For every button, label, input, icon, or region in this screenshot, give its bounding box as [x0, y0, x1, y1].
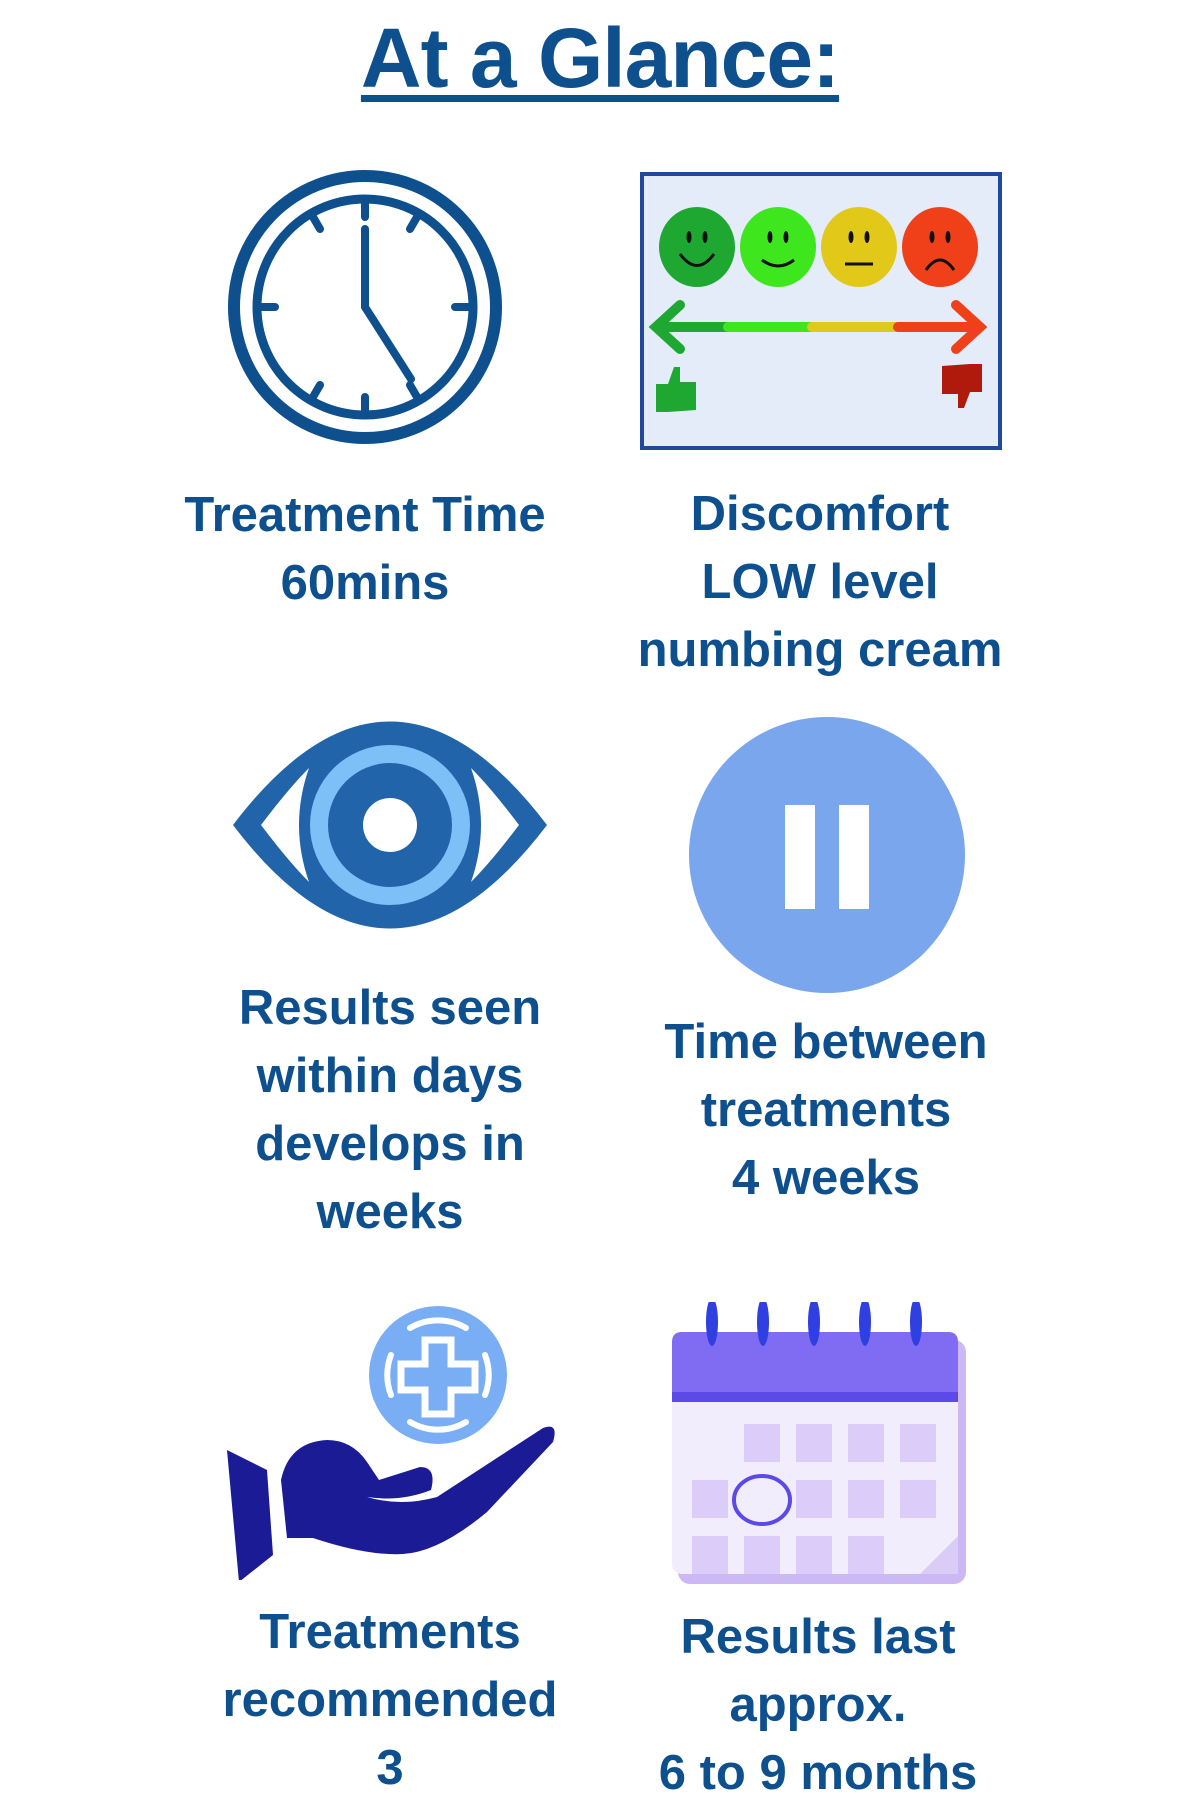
text: treatments recommended: 3: [376, 1741, 404, 1795]
text: treatment time: 60mins: [281, 556, 449, 610]
text: treatment time: Treatment Time: [184, 488, 546, 542]
text: time between: treatments: [701, 1083, 951, 1137]
text: treatments recommended: recommended: [223, 1673, 557, 1727]
text: time between: Time between: [664, 1015, 988, 1069]
text: results last: approx.: [730, 1678, 906, 1732]
icon: discomfort scale: [640, 172, 1002, 450]
text: discomfort: numbing cream: [638, 623, 1002, 677]
icon: pause: [689, 717, 965, 993]
text: results seen: within days: [257, 1049, 523, 1103]
text: discomfort: Discomfort: [691, 487, 949, 541]
text: treatments recommended: Treatments: [259, 1605, 521, 1659]
text: results seen: develops in: [255, 1117, 525, 1171]
icon: eye: [233, 722, 547, 928]
text: results seen: weeks: [316, 1185, 464, 1239]
text: time between: [664, 1015, 988, 1205]
text: results seen: Results seen: [239, 981, 541, 1035]
text: treatments recommended: [223, 1605, 557, 1795]
icon: clock: [228, 170, 502, 444]
thumbs: [656, 367, 696, 412]
icon: calendar: [672, 1302, 966, 1584]
title: At a Glance:: [361, 11, 839, 105]
icon: hand with medical coin: [227, 1306, 555, 1580]
text: time between: 4 weeks: [732, 1151, 920, 1205]
text: discomfort: [638, 487, 1002, 677]
text: results last: [659, 1610, 977, 1800]
text: results last: Results last: [680, 1610, 956, 1664]
text: results seen: [239, 981, 541, 1239]
arrow: [656, 305, 980, 349]
text: discomfort: LOW level: [702, 555, 938, 609]
text: treatment time: [184, 488, 546, 610]
faces: [659, 207, 978, 287]
text: results last: 6 to 9 months: [659, 1746, 977, 1800]
